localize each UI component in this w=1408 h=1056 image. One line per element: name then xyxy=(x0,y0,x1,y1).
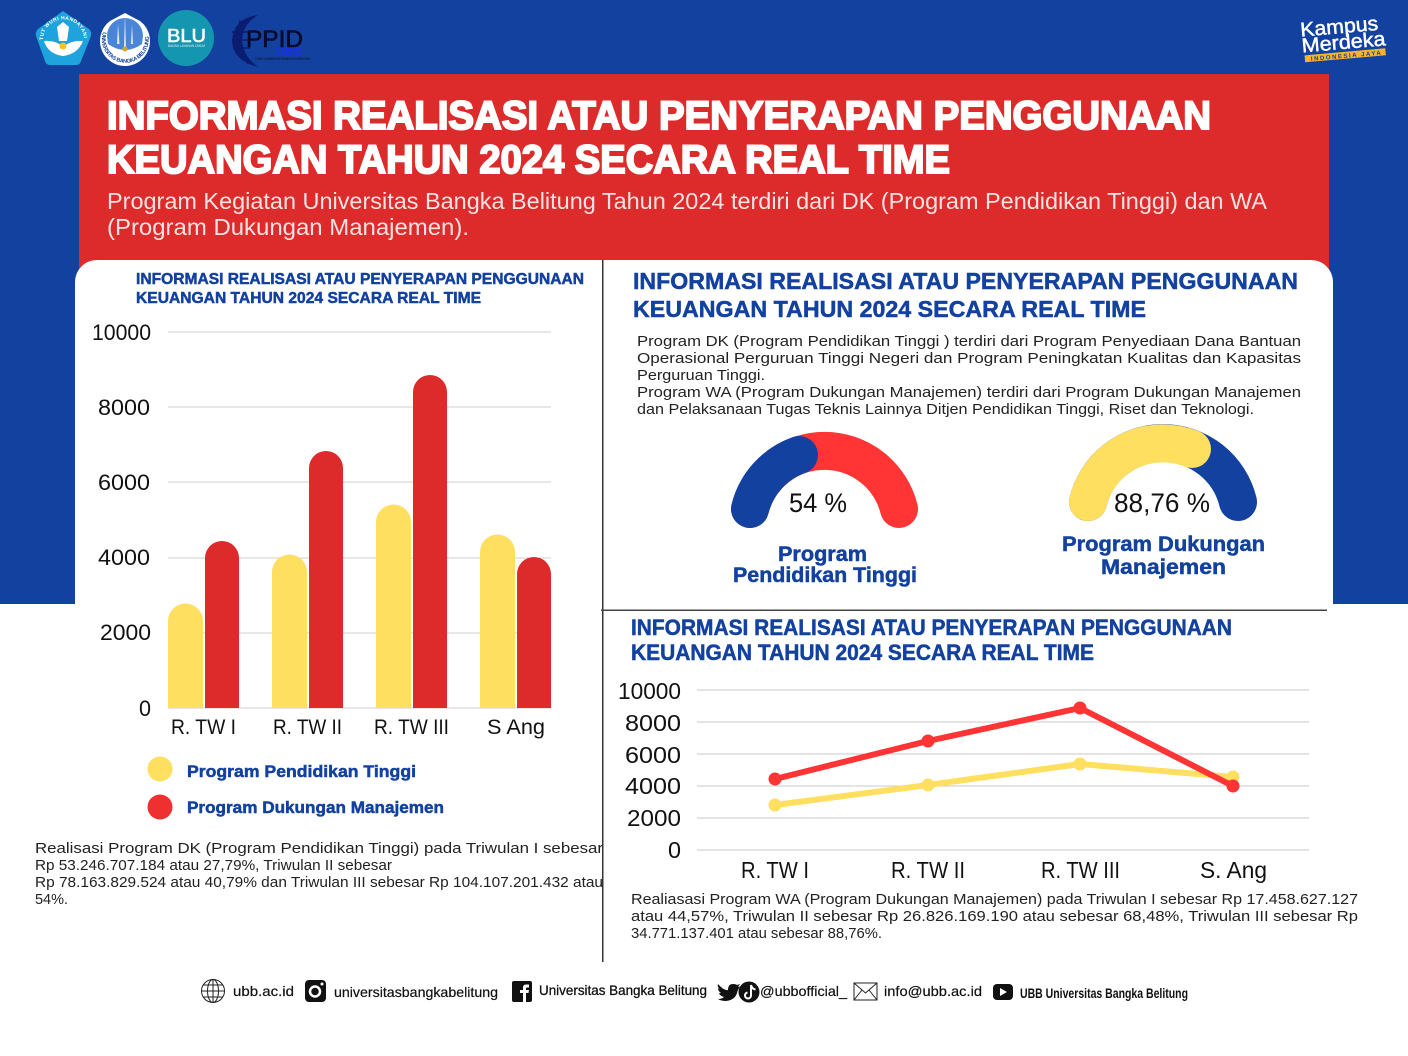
logo: BLU xyxy=(158,10,214,66)
logo: BLU: BADAN LAYANAN UMUM xyxy=(168,43,205,48)
icon: facebook xyxy=(512,981,532,1002)
logo: PPID: UBB xyxy=(276,47,302,58)
line chart: R. TW III xyxy=(1041,857,1120,883)
left heading xyxy=(136,271,584,307)
social handle: @ubbofficial_ xyxy=(760,983,847,999)
bar chart: 10000 xyxy=(92,320,151,345)
line chart description text xyxy=(631,891,1358,942)
right heading: KEUANGAN TAHUN 2024 SECARA REAL TIME xyxy=(633,296,1146,322)
bar chart: R. TW II xyxy=(273,716,342,739)
vertical divider xyxy=(602,260,604,962)
bar chart: 2000 xyxy=(100,620,151,645)
program description text: Perguruan Tinggi. xyxy=(637,367,765,384)
line chart: 0 xyxy=(668,837,681,863)
line chart: 6000 xyxy=(625,742,681,768)
gauge: Program Dukungan Manajemen: 88,76 % xyxy=(1114,488,1210,518)
right heading: INFORMASI REALISASI ATAU PENYERAPAN PENGGUNAAN xyxy=(633,268,1298,294)
website: ubb.ac.id xyxy=(233,983,294,999)
legend: Program Pendidikan Tinggi xyxy=(187,762,416,781)
gauge: Program Dukungan Manajemen: Manajemen xyxy=(1101,556,1226,579)
legend: Program Dukungan Manajemen xyxy=(187,798,444,817)
legend xyxy=(148,756,444,820)
icon: instagram xyxy=(305,980,326,1002)
line chart description text: Realiasasi Program WA (Program Dukungan Manajemen) pada Triwulan I sebesar Rp 17.458.627.127 xyxy=(631,891,1358,908)
panel: right top gauges section xyxy=(633,268,1301,587)
logo: PPID: PPID xyxy=(246,26,303,53)
instagram handle: universitasbangkabelitung xyxy=(334,984,498,1000)
subtitle xyxy=(107,188,1268,240)
facebook name: Universitas Bangka Belitung xyxy=(539,982,707,998)
left description text: Realisasi Program DK (Program Pendidikan Tinggi) pada Triwulan I sebesar xyxy=(35,840,603,857)
left description text: Rp 78.163.829.524 atau 40,79% dan Triwulan III sebesar Rp 104.107.201.432 atau xyxy=(35,874,603,891)
bar chart: 4000 xyxy=(98,545,150,570)
program description text: dan Pelaksanaan Tugas Teknis Lainnya Ditjen Pendidikan Tinggi, Riset dan Teknologi. xyxy=(637,401,1254,418)
logo: PPID xyxy=(232,15,310,67)
program description text: Program WA (Program Dukungan Manajemen) terdiri dari Program Dukungan Manajemen xyxy=(637,384,1301,401)
title xyxy=(107,94,1211,182)
line chart xyxy=(618,678,1309,883)
icon: youtube xyxy=(993,984,1013,1000)
email: info@ubb.ac.id xyxy=(884,983,982,999)
gauge: Program Pendidikan Tinggi: Pendidikan Tinggi xyxy=(733,564,917,587)
gauge: Program Pendidikan Tinggi: Program xyxy=(778,543,867,566)
line chart: 2000 xyxy=(627,805,681,831)
icon: mail xyxy=(854,983,877,1000)
panel: red title banner xyxy=(79,74,1329,274)
logo: BLU: BLU xyxy=(167,26,206,46)
panel: right bottom line chart section xyxy=(618,615,1358,942)
bar chart: R. TW III xyxy=(374,716,449,739)
subtitle: Program Kegiatan Universitas Bangka Belitung Tahun 2024 terdiri dari DK (Program Pendidikan Tinggi) dan WA xyxy=(107,188,1268,214)
icon: tiktok xyxy=(738,982,760,1002)
logo: Kampus Merdeka xyxy=(1299,12,1388,63)
bar chart: 0 xyxy=(139,696,151,721)
logo: Kemdikbud: TUT WURI HANDAYANI xyxy=(40,16,88,40)
line chart: S. Ang xyxy=(1200,857,1267,883)
left heading: INFORMASI REALISASI ATAU PENYERAPAN PENGGUNAAN xyxy=(136,271,584,288)
line chart: R. TW II xyxy=(891,857,965,883)
logo: Kampus Merdeka: Merdeka xyxy=(1301,28,1387,58)
blue background band xyxy=(0,0,1408,604)
title: KEUANGAN TAHUN 2024 SECARA REAL TIME xyxy=(107,138,950,182)
logo: Universitas Bangka Belitung xyxy=(100,13,150,66)
line chart description text: 34.771.137.401 atau sebesar 88,76%. xyxy=(631,925,882,942)
right heading xyxy=(633,268,1298,322)
gauge: Program Pendidikan Tinggi: 54 % xyxy=(789,488,847,518)
line chart description text: atau 44,57%, Triwulan II sebesar Rp 26.826.169.190 atau sebesar 68,48%, Triwulan III sebesar Rp xyxy=(631,908,1358,925)
line chart: 4000 xyxy=(625,773,681,799)
icon: twitter xyxy=(718,984,740,1001)
footer: contact links xyxy=(202,980,1188,1002)
bar chart: R. TW I xyxy=(171,716,236,739)
line chart: 10000 xyxy=(618,678,681,704)
gauge: Program Dukungan Manajemen xyxy=(1062,443,1265,579)
program description text: Operasional Perguruan Tinggi Negeri dan Program Peningkatan Kualitas dan Kapasitas xyxy=(637,350,1301,367)
icon: globe xyxy=(202,980,224,1002)
title: INFORMASI REALISASI ATAU PENYERAPAN PENGGUNAAN xyxy=(107,94,1211,138)
program description text xyxy=(637,333,1301,418)
logo: Kemdikbud xyxy=(36,11,92,65)
bar chart xyxy=(92,320,551,739)
gauge: Program Pendidikan Tinggi xyxy=(733,451,917,587)
logo: PPID: PUSAT LAYANAN INFORMASI DOKUMENTASI xyxy=(255,57,310,61)
panel: left bar chart section xyxy=(35,271,603,908)
line chart heading: INFORMASI REALISASI ATAU PENYERAPAN PENGGUNAAN xyxy=(631,615,1232,640)
youtube channel: UBB Universitas Bangka Belitung xyxy=(1020,985,1188,1001)
line chart: 8000 xyxy=(625,710,681,736)
horizontal divider xyxy=(601,610,1327,611)
program description text: Program DK (Program Pendidikan Tinggi ) terdiri dari Program Penyediaan Dana Bantuan xyxy=(637,333,1301,350)
white content panel xyxy=(75,260,1333,604)
subtitle: (Program Dukungan Manajemen). xyxy=(107,214,469,240)
line chart heading: KEUANGAN TAHUN 2024 SECARA REAL TIME xyxy=(631,640,1094,665)
left description text xyxy=(35,840,603,908)
bar chart: 8000 xyxy=(98,395,150,420)
logo: Kampus Merdeka: INDONESIA JAYA xyxy=(1311,51,1382,63)
bar chart: S Ang xyxy=(487,716,545,739)
left description text: 54%. xyxy=(35,891,68,908)
left heading: KEUANGAN TAHUN 2024 SECARA REAL TIME xyxy=(136,290,481,307)
line chart: R. TW I xyxy=(741,857,809,883)
logo: Universitas Bangka Belitung: UNIVERSITAS BANGKA BELITUNG xyxy=(102,32,149,63)
line chart heading xyxy=(631,615,1232,665)
gauge: Program Dukungan Manajemen: Program Dukungan xyxy=(1062,533,1265,556)
logo: Kampus Merdeka: Kampus xyxy=(1299,13,1379,42)
left description text: Rp 53.246.707.184 atau 27,79%, Triwulan II sebesar xyxy=(35,857,392,874)
bar chart: 6000 xyxy=(98,470,150,495)
